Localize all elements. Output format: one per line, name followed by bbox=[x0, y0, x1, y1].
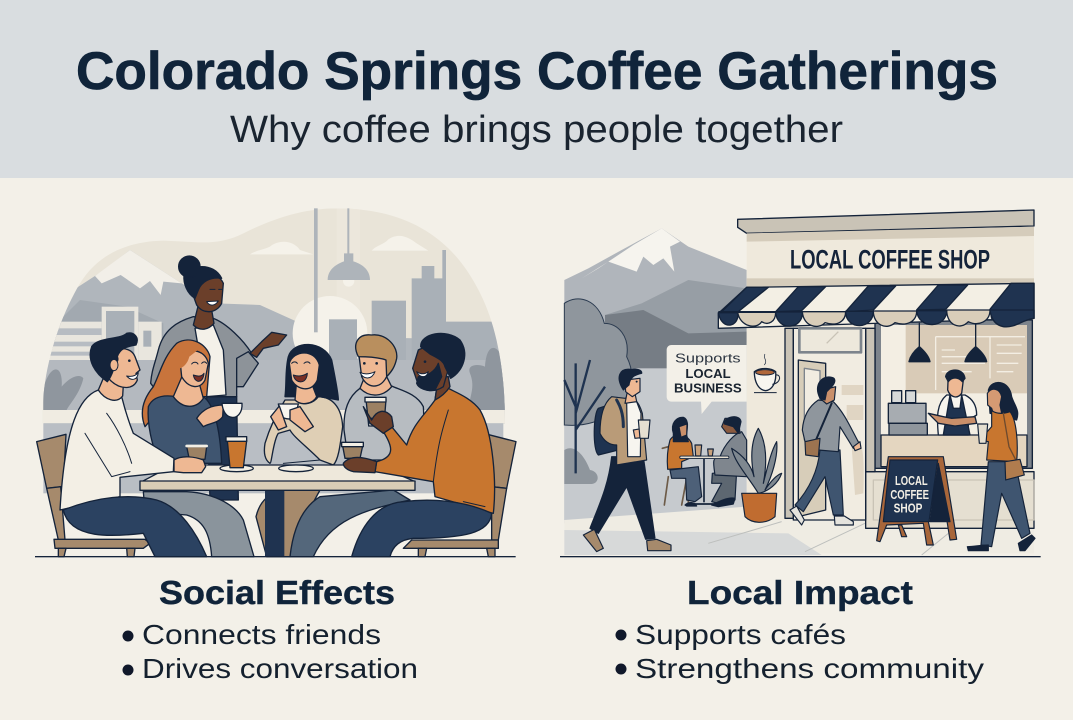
bullet: supports cafes: Supports cafés bbox=[635, 619, 846, 650]
panel: social effects text bbox=[122, 574, 418, 684]
header band bbox=[0, 0, 1073, 178]
person: blond man bbox=[290, 335, 424, 557]
speech bubble: supports local business: Supports bbox=[675, 350, 741, 365]
heading: local impact: Local Impact bbox=[687, 574, 913, 611]
heading: social effects: Social Effects bbox=[159, 574, 395, 611]
person: woman in beige sweater bbox=[256, 345, 343, 557]
a-frame sidewalk sign: SHOP bbox=[894, 501, 922, 516]
illustration: local coffee shop street scene bbox=[560, 210, 1041, 557]
right chair bbox=[403, 434, 516, 557]
espresso machine bbox=[888, 391, 927, 435]
icon: steaming coffee cup bbox=[754, 354, 780, 393]
bullet: drives conversation: Drives conversation bbox=[142, 653, 418, 684]
person: man entering shop bbox=[790, 377, 861, 525]
shop building bbox=[718, 210, 1034, 528]
icon: pendant lamps bbox=[909, 323, 987, 362]
icon: orange coffee cup bbox=[226, 437, 247, 468]
person: man walking with coffee bbox=[583, 369, 671, 552]
shop sign text: LOCAL COFFEE SHOP bbox=[790, 245, 990, 275]
barista bbox=[928, 370, 977, 435]
bullet: connects friends: Connects friends bbox=[142, 619, 381, 650]
person: man in orange sweater bbox=[343, 333, 495, 557]
a-frame sidewalk sign: COFFEE bbox=[890, 487, 929, 502]
cornice bbox=[738, 210, 1034, 242]
subtitle: Why coffee brings people together bbox=[230, 109, 843, 151]
panel: local impact text bbox=[616, 574, 984, 684]
title: Colorado Springs Coffee Gatherings bbox=[76, 42, 998, 101]
window backdrop with mountains and skyline bbox=[43, 208, 505, 424]
a-frame sidewalk sign bbox=[877, 457, 957, 545]
menu board bbox=[936, 337, 1025, 390]
storefront base bbox=[866, 472, 1034, 528]
seated couple at outdoor table bbox=[662, 417, 747, 507]
speech bubble: supports local business: BUSINESS bbox=[674, 381, 742, 395]
person: man in white sweater bbox=[60, 333, 207, 557]
doorway bbox=[785, 328, 875, 520]
person: woman with tote bag bbox=[967, 382, 1035, 551]
mountain landscape bbox=[564, 228, 747, 523]
icon: paper cup bbox=[342, 442, 363, 458]
sidewalk bbox=[564, 507, 1034, 555]
bullet: strengthens community: Strengthens community bbox=[635, 653, 984, 684]
speech bubble: supports local business bbox=[667, 345, 747, 414]
a-frame sidewalk sign: LOCAL bbox=[895, 473, 928, 488]
interior window wall bbox=[875, 320, 1032, 468]
striped awning bbox=[718, 283, 1034, 328]
table with cups bbox=[140, 437, 415, 557]
person: standing woman bbox=[151, 256, 287, 500]
illustration: friends around a cafe table bbox=[30, 200, 530, 557]
left chair bbox=[37, 434, 150, 557]
floor line bbox=[560, 556, 1041, 557]
speech bubble: supports local business: LOCAL bbox=[685, 367, 731, 381]
potted plant bbox=[732, 428, 782, 522]
person: woman with red hair bbox=[142, 340, 254, 557]
floor line bbox=[35, 556, 516, 557]
icon: pendant lamp bbox=[328, 208, 370, 287]
icon: saucer and plate bbox=[220, 465, 313, 472]
